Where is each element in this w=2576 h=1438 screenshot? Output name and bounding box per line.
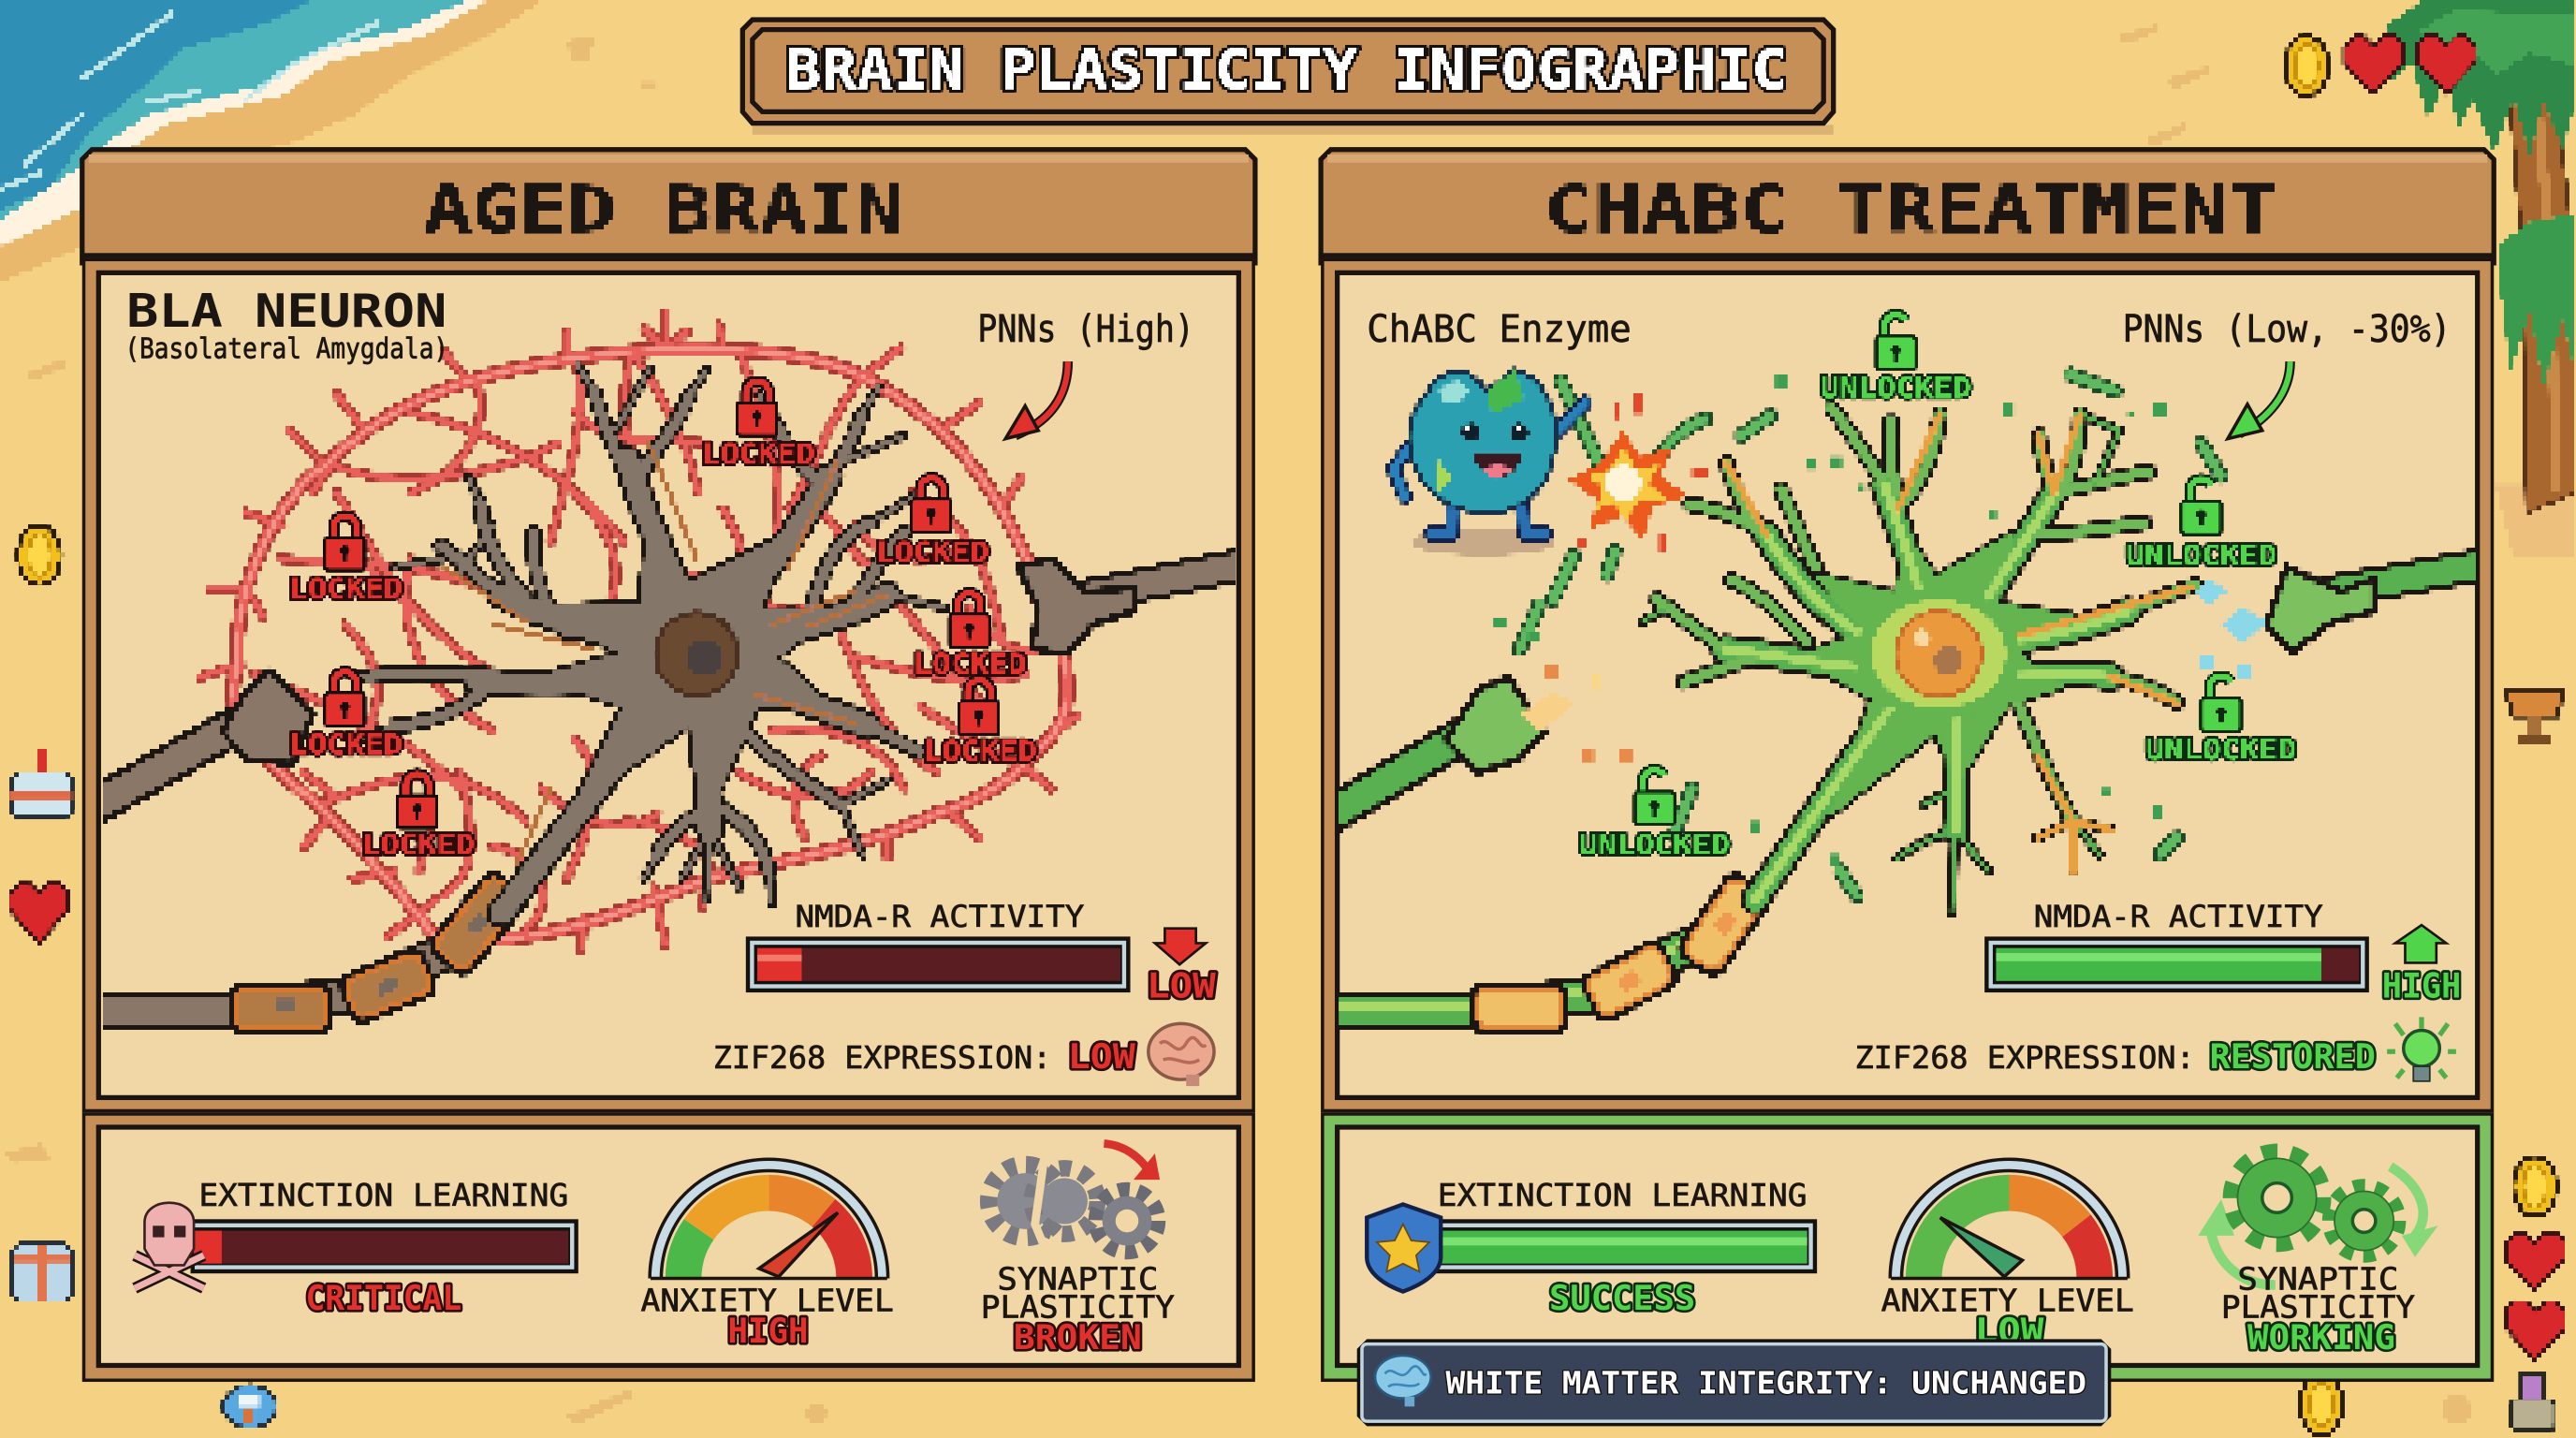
PNN reduced label: PNNs (Low, -30%) [2123,307,2452,351]
gift [11,1244,72,1301]
callout: white matter integrity: WHITE MATTER INTEGRITY: UNCHANGED [1445,1364,2086,1401]
lock tags: LOCKED [914,649,1027,682]
title plaque [742,20,1834,135]
enzyme label: ChABC Enzyme [1367,307,1632,351]
trophy [2506,690,2565,746]
broken gears: PLASTICITY [981,1289,1175,1326]
arrow: PNN pointer [1005,361,1068,439]
panel: treatment outcomes [1323,1114,2492,1380]
lock tags: LOCKED [361,829,475,862]
PNN label: PNNs (High) [977,307,1194,351]
extinction learning bar: SUCCESS [1549,1278,1695,1318]
extinction learning bar: CRITICAL [305,1278,461,1318]
dendrites and soma [1643,407,2195,912]
enzyme explosion [1569,394,1707,550]
extinction learning bar: EXTINCTION LEARNING [1438,1177,1808,1213]
lock tags: LOCKED [875,536,989,569]
extinction learning bar [1429,1177,1817,1318]
working gears [2198,1153,2438,1357]
ZIF268 status: RESTORED [2210,1036,2376,1077]
unlock tags: UNLOCKED [2126,540,2277,573]
lock tags: LOCKED [701,438,815,471]
neuron heading: (Basolateral Amygdala) [124,333,448,366]
cake [11,749,72,816]
neuron heading [124,284,448,366]
unlock tags [1579,315,2297,862]
sparks [1519,666,1632,761]
working gears: PLASTICITY [2221,1289,2415,1326]
NMDA-R meter: NMDA-R ACTIVITY [2034,901,2323,934]
nucleus [655,613,738,695]
aged brain heading bar: AGED BRAIN [424,172,903,247]
anxiety gauge: HIGH [728,1311,809,1351]
NMDA-R meter [746,901,1217,1005]
panel: aged outcomes [84,1114,1253,1380]
dendrites and soma [337,365,944,914]
broken gears [981,1144,1175,1357]
lock tags: LOCKED [923,736,1036,769]
ocean shoreline [0,0,542,283]
jar [2512,1373,2554,1430]
neuron heading: BLA NEURON [126,284,446,338]
icon: blue brain [1375,1356,1431,1406]
incoming axons [1327,564,2489,816]
anxiety gauge: ANXIETY LEVEL [640,1283,894,1319]
icon: skull [135,1203,204,1288]
lock tags: LOCKED [289,573,402,606]
extinction learning bar [191,1177,578,1318]
broken gears: SYNAPTIC [997,1261,1158,1298]
treatment heading bar [1321,150,2494,263]
treatment frame [1323,259,2492,1110]
myelinated axon [98,871,527,1030]
restored neuron [1327,370,2489,1030]
title text: BRAIN PLASTICITY INFOGRAPHIC [785,38,1788,103]
potion [224,1386,276,1428]
NMDA-R meter: NMDA-R ACTIVITY [795,901,1084,934]
NMDA-R meter: HIGH [2382,965,2461,1005]
neuron with perineuronal net [82,312,1249,1030]
ZIF268 status: ZIF268 EXPRESSION: [713,1039,1051,1076]
palm tree [2389,0,2576,559]
ZIF268 status [1855,1017,2456,1081]
ZIF268 status [713,1023,1214,1086]
lock tags [289,381,1036,862]
enzyme mascot [1393,370,1586,555]
aged brain frame [84,259,1253,1110]
working gears: WORKING [2247,1317,2395,1357]
ZIF268 status: LOW [1068,1036,1136,1077]
icon: shield [1367,1204,1441,1292]
incoming axons [82,559,1249,814]
treatment heading bar: CHABC TREATMENT [1544,172,2277,247]
anxiety gauge [1881,1165,2134,1351]
arrow: PNN pointer [2228,361,2291,439]
panel: aged brain [82,150,1255,1380]
NMDA-R meter [1984,901,2461,1005]
extinction learning bar: EXTINCTION LEARNING [198,1177,568,1213]
NMDA-R meter: LOW [1147,965,1217,1005]
anxiety gauge: ANXIETY LEVEL [1881,1283,2134,1319]
myelinated axon [1331,873,1770,1030]
broken gears: BROKEN [1014,1317,1142,1357]
aged brain heading bar [82,150,1255,263]
PNN fragments [1519,374,2221,896]
ZIF268 status: ZIF268 EXPRESSION: [1855,1039,2195,1076]
unlock tags: UNLOCKED [1821,373,1971,405]
nucleus [1895,611,1982,697]
unlock tags: UNLOCKED [2145,734,2297,767]
unlock tags: UNLOCKED [1579,829,1730,862]
perineuronal net [200,312,1077,953]
callout: white matter integrity [1357,1339,2111,1426]
anxiety gauge [640,1165,894,1351]
panel: ChABC treatment [1321,150,2494,1380]
lock tags: LOCKED [289,729,402,762]
anxiety gauge: LOW [1975,1311,2044,1351]
working gears: SYNAPTIC [2237,1261,2398,1298]
